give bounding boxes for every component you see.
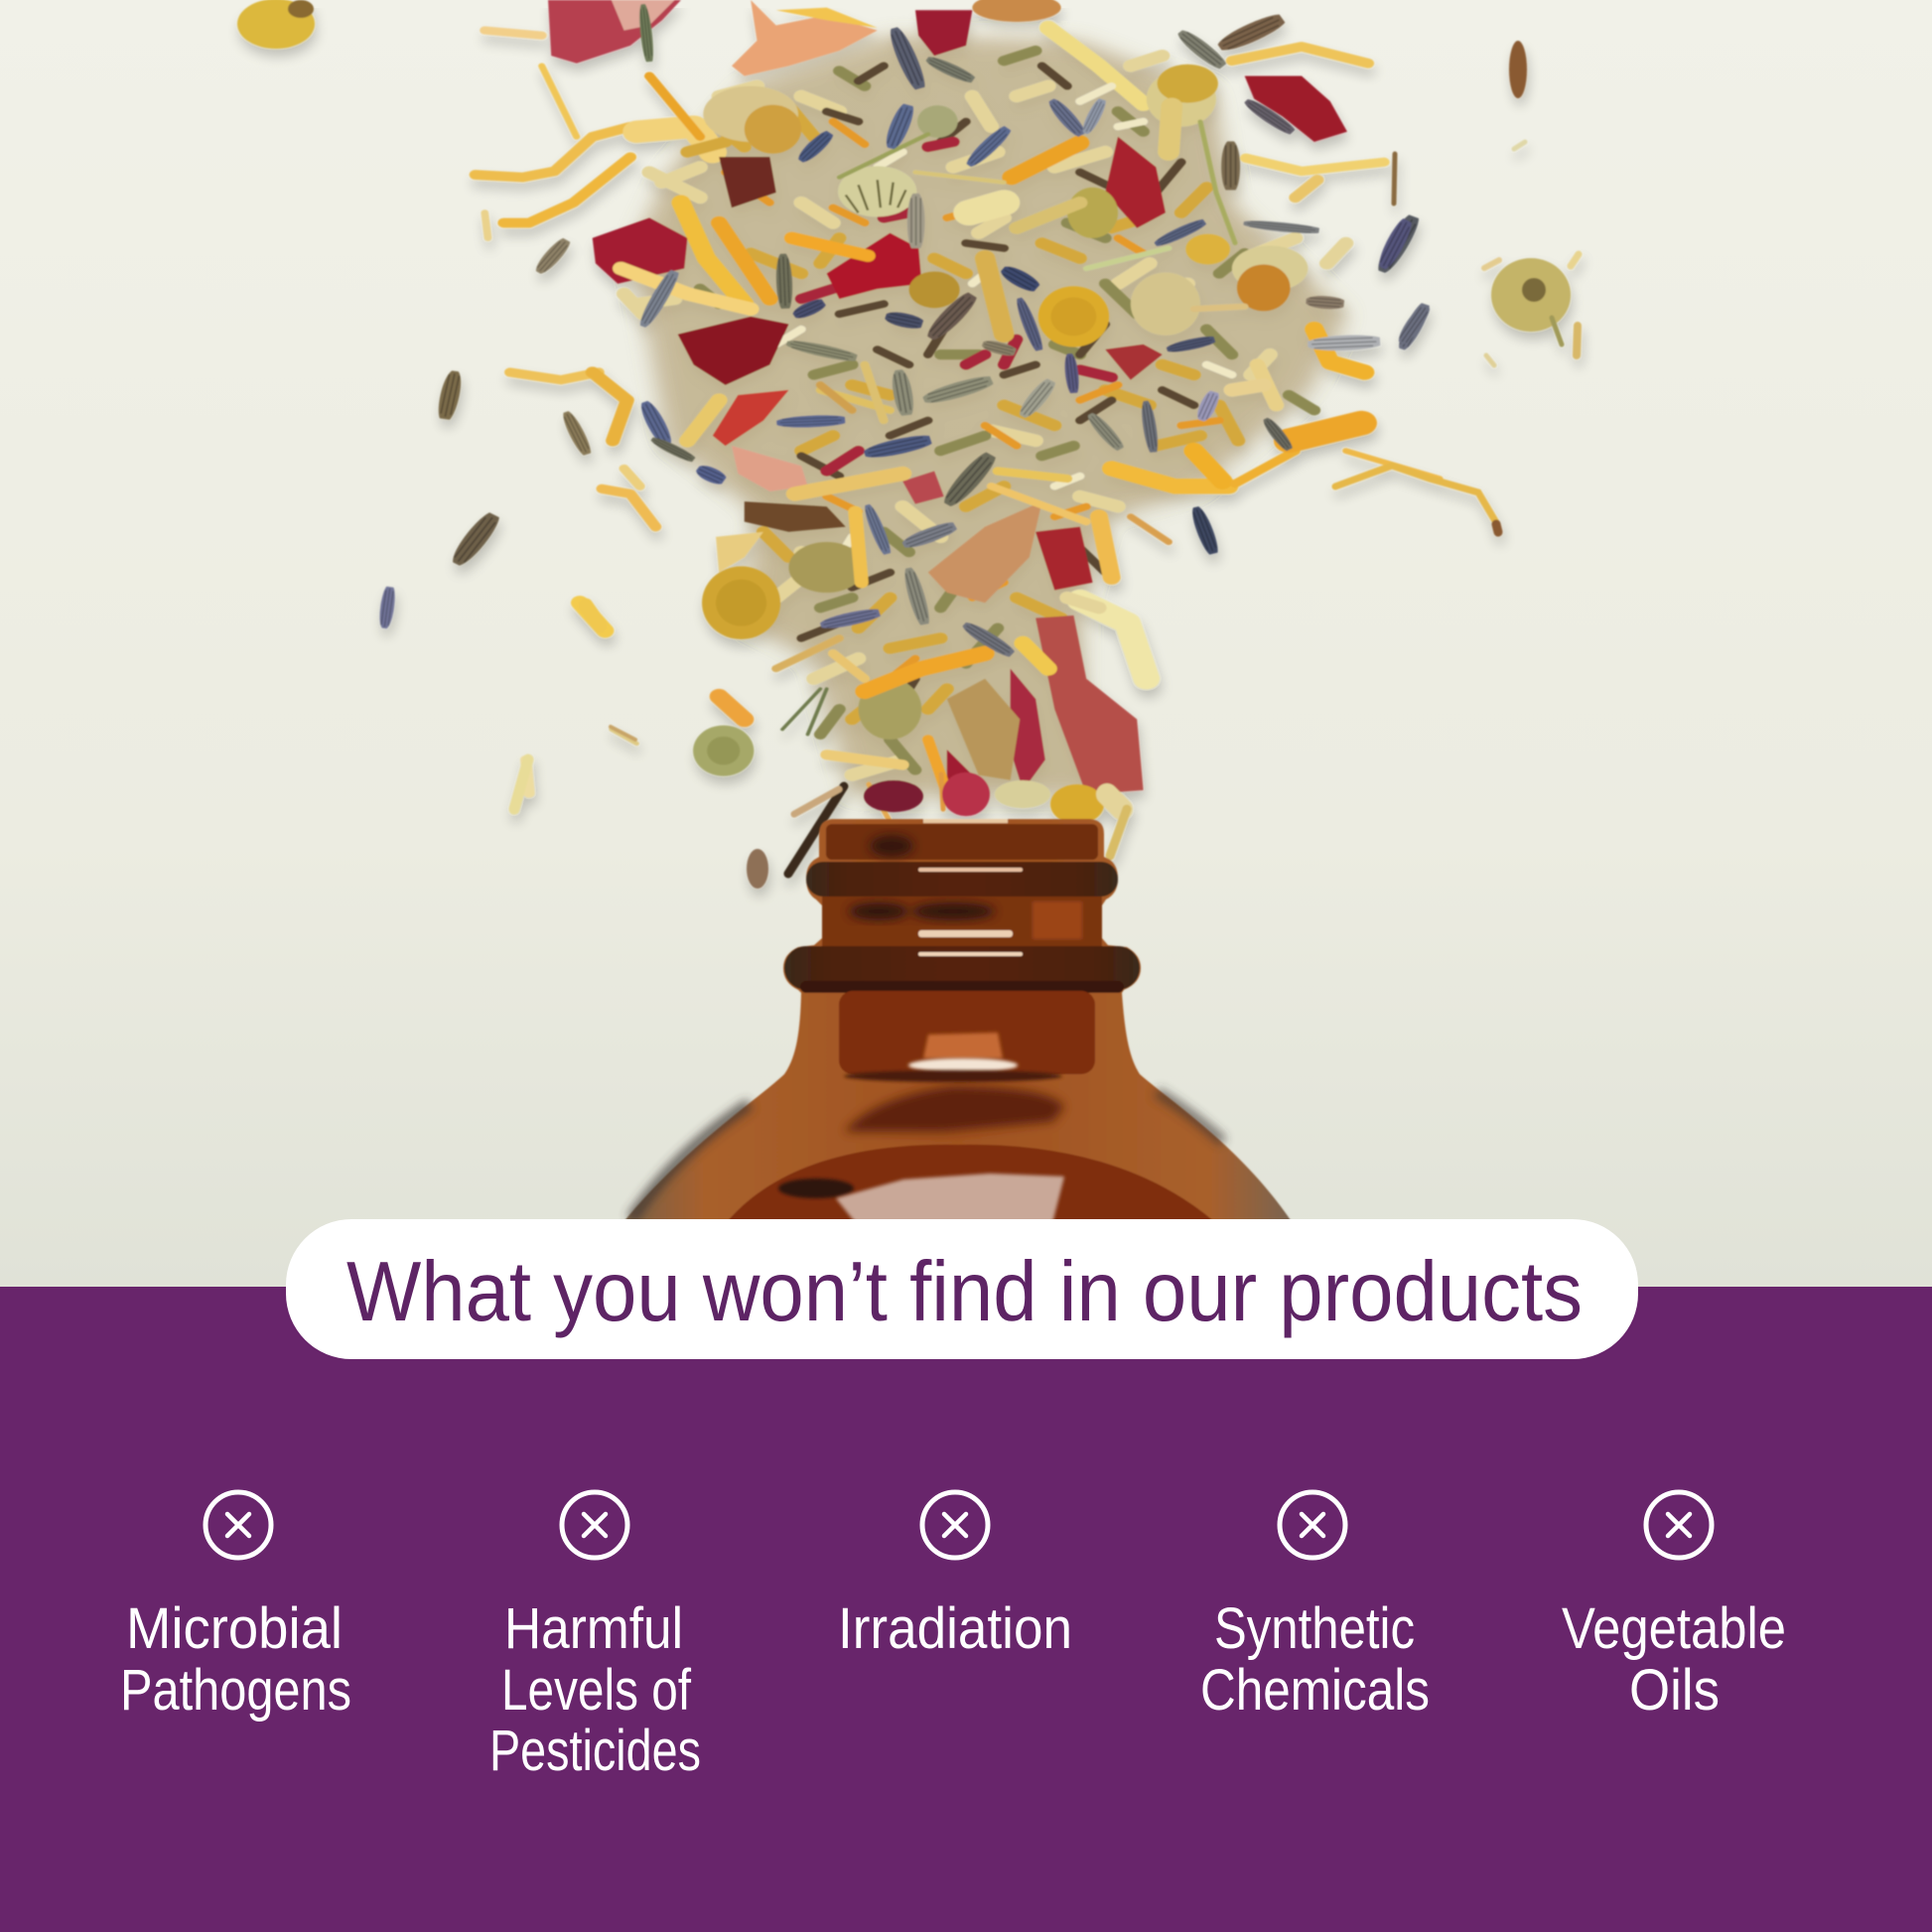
item: Harmful Levels of Pesticides	[489, 1492, 701, 1783]
item: Irradiation	[838, 1492, 1072, 1661]
dark smudge	[844, 1086, 1064, 1132]
label: Harmful	[504, 1596, 683, 1661]
label: Pathogens	[120, 1658, 351, 1723]
glass window	[839, 991, 1095, 1074]
label: Irradiation	[838, 1596, 1072, 1661]
item: Synthetic Chemicals	[1200, 1492, 1430, 1723]
icon: crossed circle	[1646, 1492, 1712, 1558]
background paper	[0, 0, 1932, 1291]
dense flower mix	[436, 0, 1440, 794]
lower neck	[822, 897, 1102, 946]
label: Chemicals	[1200, 1658, 1430, 1723]
neck highlight	[918, 930, 1013, 937]
right scatter pieces	[1335, 41, 1579, 532]
left scatter pieces	[237, 0, 635, 1040]
left shoulder edge	[631, 1104, 750, 1219]
pale reflection	[836, 1173, 1064, 1223]
shoulder shadow	[844, 1070, 1062, 1082]
icon: crossed circle	[1280, 1492, 1345, 1558]
filler texture of petal fragments	[624, 51, 1346, 775]
lower ring	[784, 946, 1140, 990]
shoulder highlight	[908, 1058, 1018, 1072]
upper petals and stems	[621, 106, 1440, 793]
label: Microbial	[126, 1596, 343, 1661]
lower ring highlight	[918, 952, 1023, 956]
bottle body	[622, 819, 1293, 1223]
label: Levels of	[501, 1658, 692, 1723]
purple panel	[0, 1287, 1932, 1932]
upper ring	[806, 862, 1118, 897]
photo: scattered dried flowers	[237, 0, 1579, 1040]
icon: crossed circle	[562, 1492, 627, 1558]
neck side reflection	[1033, 901, 1082, 939]
heading pill	[286, 1219, 1638, 1359]
label: Pesticides	[489, 1719, 701, 1783]
heading text: What you won’t find in our products	[346, 1245, 1583, 1339]
label: Vegetable	[1562, 1596, 1786, 1661]
label: Oils	[1629, 1658, 1720, 1723]
liquid level	[726, 1145, 1216, 1223]
calendula petals under layer	[476, 28, 1384, 793]
neck smudges	[849, 902, 995, 920]
item: Microbial Pathogens	[120, 1492, 351, 1723]
pieces above the bottle rim	[747, 772, 1127, 889]
pill shape	[286, 1219, 1638, 1359]
amber glass bottle	[622, 819, 1293, 1223]
right shoulder edge	[1157, 1092, 1223, 1142]
neck top shading	[826, 824, 1098, 860]
ring shadow	[800, 981, 1124, 993]
rose petals	[548, 0, 1347, 794]
dark spot on neck	[870, 835, 913, 857]
label: Synthetic	[1214, 1596, 1415, 1661]
flower mass backing	[630, 36, 1346, 794]
dark reflection blob	[778, 1178, 854, 1198]
icon: crossed circle	[922, 1492, 988, 1558]
item: Vegetable Oils	[1562, 1492, 1786, 1723]
upper ring highlight	[918, 868, 1023, 872]
icon: crossed circle	[206, 1492, 271, 1558]
lavender buds	[436, 4, 1433, 659]
lip highlight	[923, 819, 1008, 823]
window glow	[923, 1033, 1003, 1058]
chamomile heads	[693, 65, 1308, 776]
